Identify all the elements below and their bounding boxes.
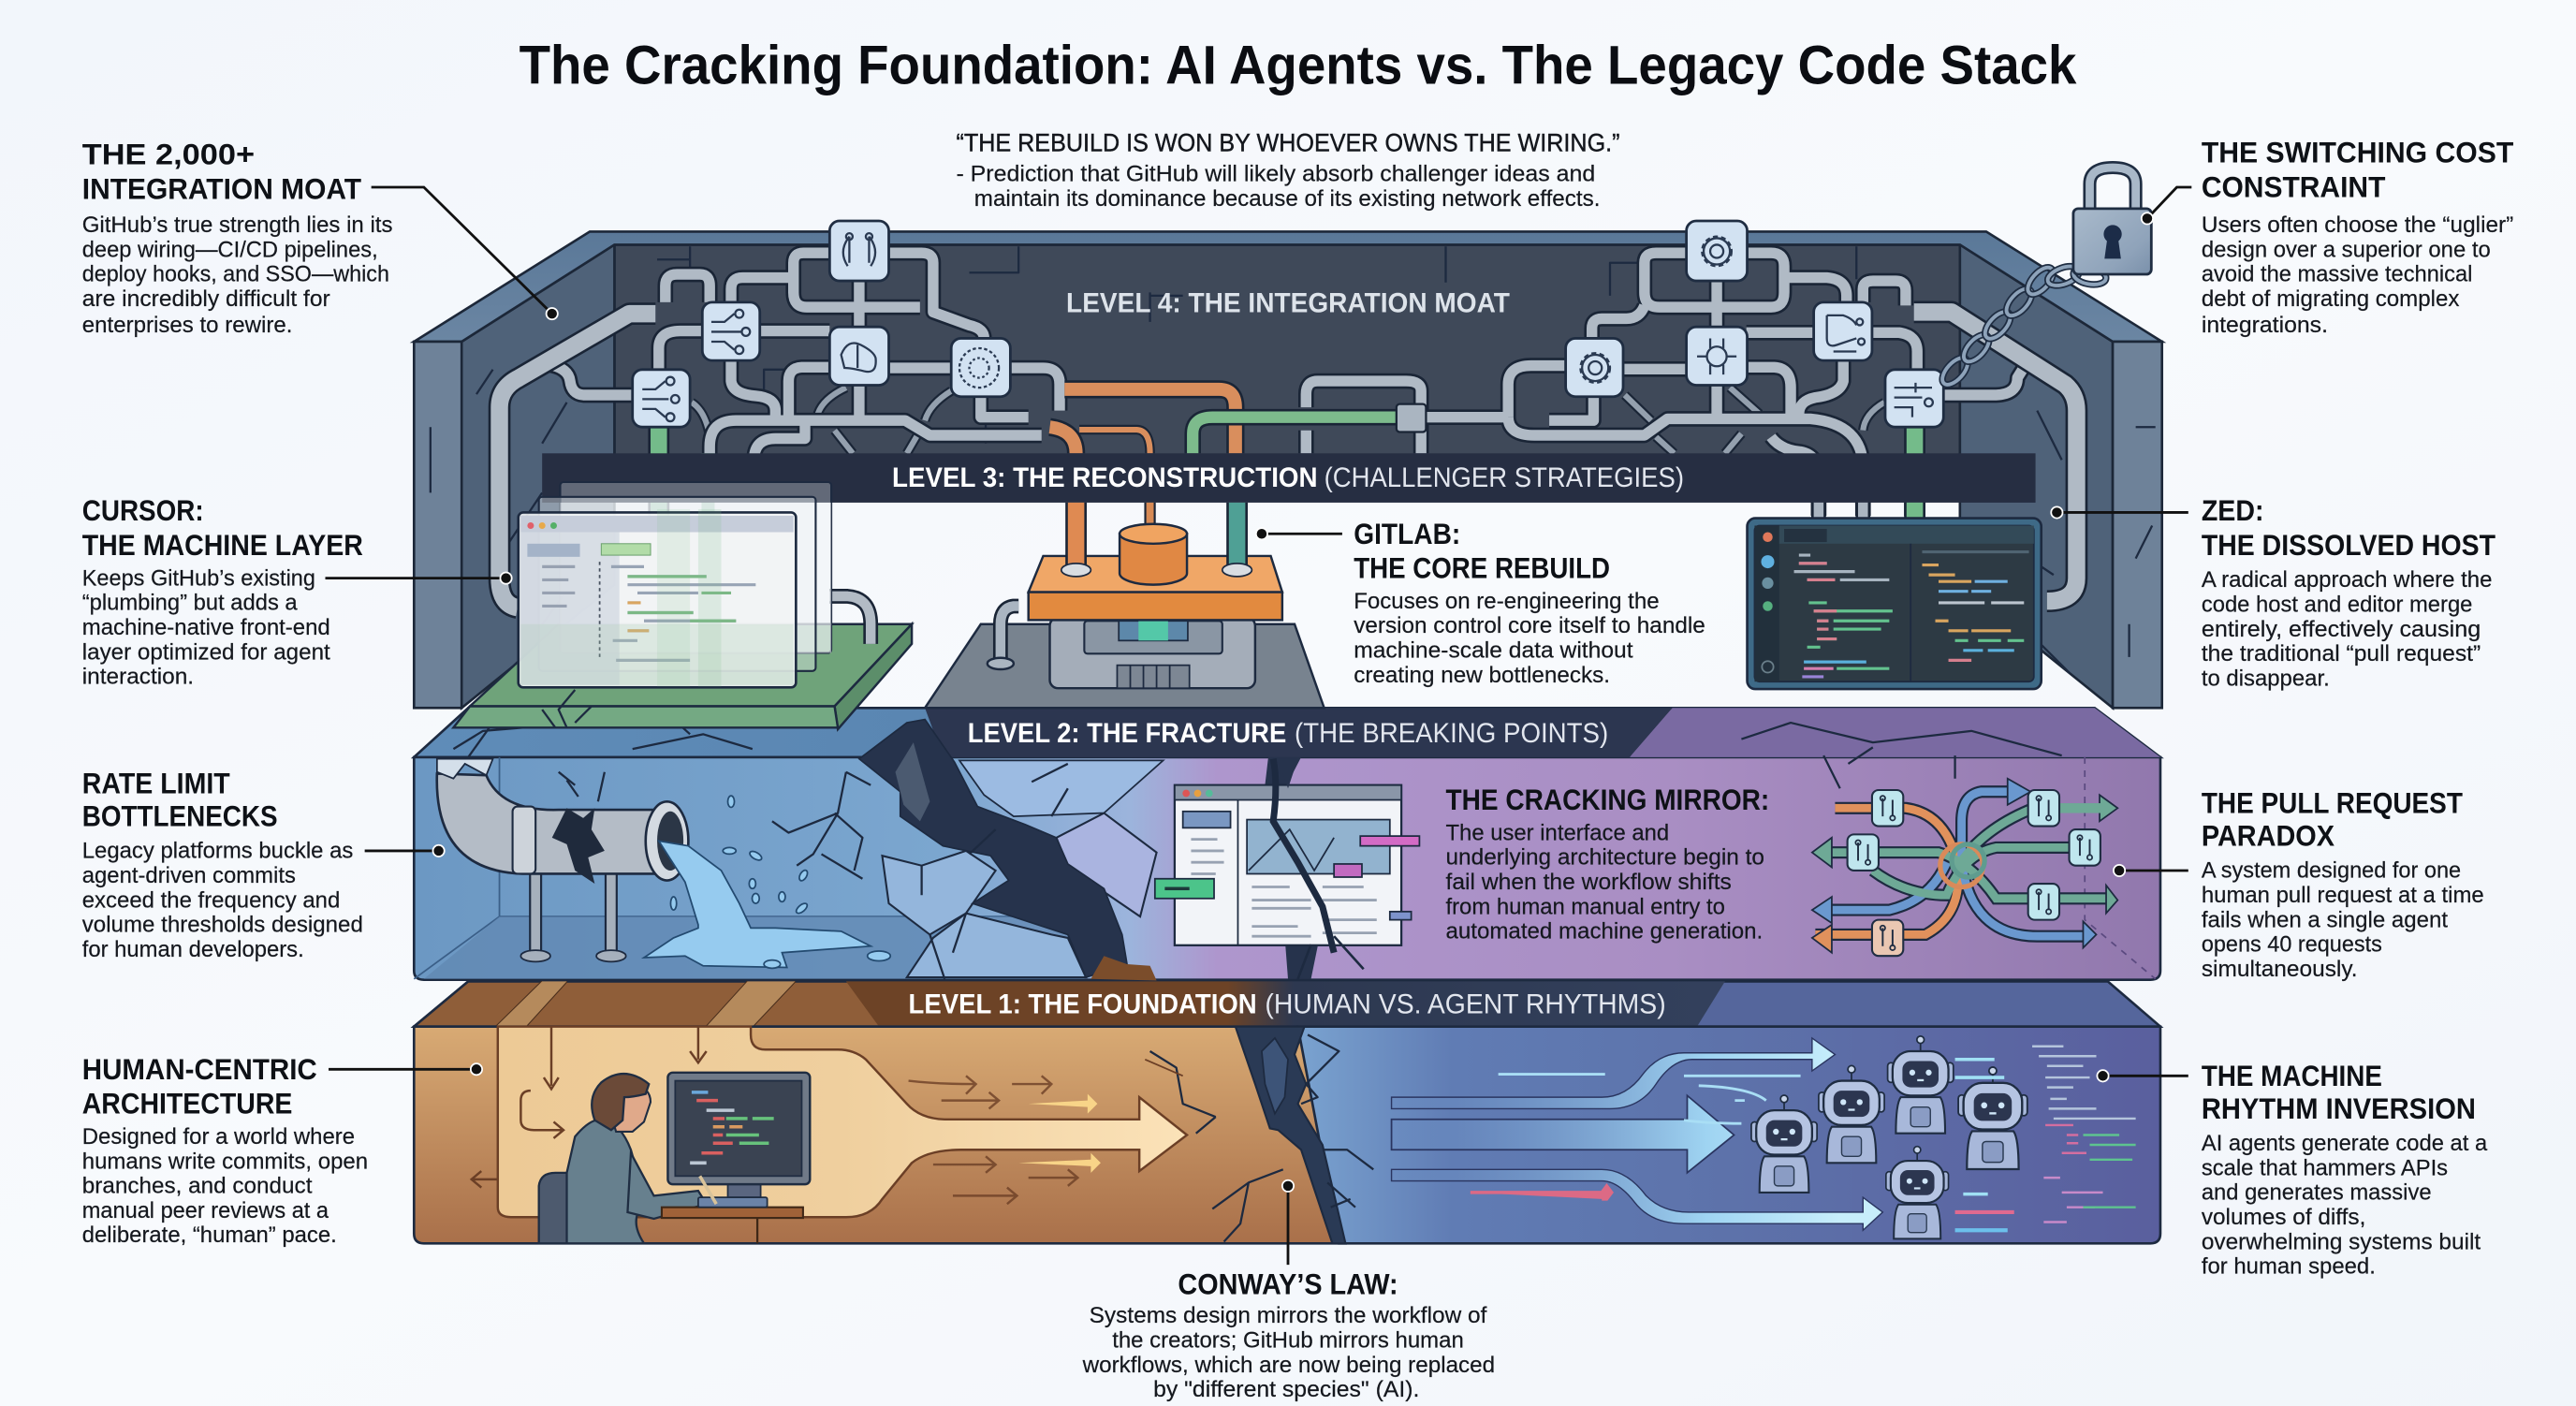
callout: machine rhythm inversion: AI agents generate code at a bbox=[2202, 1131, 2488, 1156]
callout: machine rhythm inversion: overwhelming systems built bbox=[2202, 1229, 2481, 1254]
platform: cursor green slab bbox=[453, 624, 912, 729]
icon: pull request nodes bbox=[1848, 790, 2100, 956]
arrow: rate limit leader bbox=[365, 845, 445, 857]
icon: water leak bbox=[644, 796, 890, 968]
callout: conway's law: by "different species" (AI). bbox=[1153, 1377, 1419, 1402]
label: level 2: LEVEL 2: THE FRACTURE bbox=[968, 718, 1286, 749]
quote: rebuild prediction: maintain its dominance because of its existing network effects. bbox=[974, 186, 1600, 212]
callout: pull request paradox bbox=[2202, 786, 2484, 982]
callout: the 2,000+ integration moat: THE 2,000+ bbox=[82, 137, 255, 170]
callout: gitlab core rebuild: version control core itself to handle bbox=[1354, 613, 1705, 638]
callout: gitlab core rebuild: machine-scale data without bbox=[1354, 638, 1633, 664]
crack: level 1 chasm bbox=[1145, 1027, 1373, 1243]
callout: zed dissolved host: code host and editor merge bbox=[2202, 592, 2472, 617]
icon: integration hub 10 bbox=[1885, 370, 1943, 427]
arrowheads: pull request flows bbox=[1812, 779, 2117, 953]
callout: conway's law: Systems design mirrors the workflow of bbox=[1090, 1303, 1487, 1328]
pipe network: left bbox=[500, 253, 1060, 608]
icon: gitlab core machine bbox=[1029, 503, 1282, 688]
label: level 1: LEVEL 1: THE FOUNDATION bbox=[909, 989, 1257, 1020]
arrows: fading highlights bbox=[1018, 1094, 1101, 1173]
arrow: machine rhythm leader bbox=[2097, 1070, 2188, 1081]
icon: cracking browser mirror bbox=[1155, 759, 1419, 979]
callout: machine rhythm inversion bbox=[2202, 1059, 2488, 1280]
callout: human-centric architecture bbox=[82, 1052, 368, 1248]
text: the cracking mirror: underlying architecture begin to bbox=[1445, 845, 1764, 871]
icon: zed editor monitor bbox=[1748, 519, 2042, 689]
callout: gitlab core rebuild bbox=[1354, 517, 1705, 688]
icon: robot 5 bbox=[1886, 1147, 1949, 1238]
icon: integration hub 9 gear bbox=[1566, 338, 1623, 397]
icon: broken pipe bbox=[437, 759, 688, 961]
callout: the 2,000+ integration moat: deep wiring—CI/CD pipelines, bbox=[82, 237, 378, 262]
callout: pull request paradox: PARADOX bbox=[2202, 819, 2334, 853]
icon: robot 2 bbox=[1819, 1065, 1884, 1163]
arrows: agent flows bbox=[1392, 1038, 1882, 1230]
icon: robot 3 bbox=[1888, 1036, 1954, 1134]
icon: integration hub 2 bbox=[702, 302, 760, 360]
callout: zed dissolved host: the traditional “pull request” bbox=[2202, 641, 2481, 666]
icon: integration hub 7 bbox=[1687, 327, 1748, 385]
callout: zed dissolved host: A radical approach where the bbox=[2202, 567, 2492, 593]
callout: rate limit bottlenecks: volume thresholds designed bbox=[82, 913, 363, 938]
callout: conway's law: the creators; GitHub mirrors human bbox=[1112, 1328, 1464, 1354]
callout: switching cost constraint: debt of migrating complex bbox=[2202, 286, 2459, 312]
callout: rate limit bottlenecks bbox=[82, 767, 363, 962]
arrow: gitlab leader bbox=[1256, 528, 1342, 539]
callout: conway's law: workflows, which are now being replaced bbox=[1082, 1353, 1495, 1378]
icon: padlock and chain bbox=[1938, 168, 2151, 388]
callout: zed dissolved host: to disappear. bbox=[2202, 666, 2330, 691]
callout: zed dissolved host: entirely, effectively causing bbox=[2202, 617, 2481, 642]
icon: integration hub 1 bbox=[829, 221, 889, 281]
callout: cursor machine layer: THE MACHINE LAYER bbox=[82, 528, 363, 562]
pipe network: right bbox=[1306, 253, 2076, 601]
callout: cursor machine layer: layer optimized for agent bbox=[82, 639, 330, 665]
callout: the 2,000+ integration moat: GitHub’s true strength lies in its bbox=[82, 212, 392, 238]
callout: rate limit bottlenecks: agent-driven commits bbox=[82, 863, 296, 888]
callout: pull request paradox: human pull request at a time bbox=[2202, 883, 2484, 908]
arrow: integration moat leader bbox=[372, 187, 558, 319]
icon: developer at desk bbox=[539, 1073, 810, 1243]
icon: tangled pull requests bbox=[1815, 792, 2106, 936]
callout: machine rhythm inversion: scale that hammers APIs bbox=[2202, 1155, 2448, 1180]
callout: pull request paradox: opens 40 requests bbox=[2202, 932, 2382, 958]
crack: rock shards bbox=[772, 720, 1325, 981]
icon: robot 4 bbox=[1958, 1067, 2027, 1169]
label: level 2: (THE BREAKING POINTS) bbox=[1295, 718, 1608, 749]
callout: gitlab core rebuild: Focuses on re-engineering the bbox=[1354, 589, 1660, 614]
callout: gitlab core rebuild: creating new bottlenecks. bbox=[1354, 663, 1610, 688]
quote: rebuild prediction: “THE REBUILD IS WON BY WHOEVER OWNS THE WIRING.” bbox=[956, 127, 1620, 156]
panel: level 3 header bar bbox=[542, 453, 2036, 503]
callout: conway's law: CONWAY’S LAW: bbox=[1178, 1267, 1398, 1301]
callout: cursor machine layer bbox=[82, 493, 363, 690]
panel: level 2 slab bbox=[414, 708, 2160, 980]
callout: switching cost constraint: Users often choose the “uglier” bbox=[2202, 212, 2513, 238]
callout: the 2,000+ integration moat: enterprises to rewire. bbox=[82, 313, 292, 338]
arrows: small human steps bbox=[472, 1027, 1077, 1204]
icon: integration hub 5 bbox=[633, 370, 690, 427]
callout: cursor machine layer: interaction. bbox=[82, 665, 194, 690]
callout: pull request paradox: THE PULL REQUEST bbox=[2202, 786, 2463, 820]
panel: level 4 integration moat wall bbox=[414, 231, 2162, 708]
callout: human-centric architecture: manual peer reviews at a bbox=[82, 1198, 329, 1223]
callout: pull request paradox: fails when a single agent bbox=[2202, 907, 2448, 932]
callout: switching cost constraint: THE SWITCHING COST bbox=[2202, 136, 2513, 169]
callout: zed dissolved host: THE DISSOLVED HOST bbox=[2202, 528, 2496, 562]
callout: the 2,000+ integration moat bbox=[82, 137, 392, 338]
arrow: switching cost leader bbox=[2142, 187, 2191, 225]
callout: zed dissolved host bbox=[2202, 493, 2496, 691]
arrow: human-centric leader bbox=[329, 1063, 482, 1075]
icon: robot 1 bbox=[1751, 1095, 1817, 1193]
callout: the 2,000+ integration moat: deploy hooks, and SSO—which bbox=[82, 262, 389, 287]
callout: switching cost constraint: integrations. bbox=[2202, 313, 2328, 338]
title: The Cracking Foundation: AI Agents vs. The Legacy Code Stack bbox=[520, 35, 2077, 95]
icon: integration hub 3 bbox=[829, 327, 889, 385]
callout: cursor machine layer: CURSOR: bbox=[82, 493, 204, 527]
icon: integration hub 4 bbox=[951, 338, 1010, 397]
callout: switching cost constraint: avoid the massive technical bbox=[2202, 262, 2472, 287]
callout: switching cost constraint: design over a superior one to bbox=[2202, 237, 2491, 262]
icon: integration hub 8 bbox=[1814, 302, 1872, 360]
arrow: zed leader bbox=[2051, 506, 2188, 519]
pipe: elbow behind cursor windows bbox=[829, 596, 871, 644]
callout: human-centric architecture: branches, and conduct bbox=[82, 1174, 313, 1199]
callout: rate limit bottlenecks: for human developers. bbox=[82, 937, 304, 962]
arrow: cursor leader bbox=[326, 573, 512, 584]
callout: machine rhythm inversion: volumes of diffs, bbox=[2202, 1205, 2365, 1230]
callout: rate limit bottlenecks: RATE LIMIT bbox=[82, 767, 230, 800]
callout: machine rhythm inversion: and generates massive bbox=[2202, 1180, 2432, 1206]
callout: the 2,000+ integration moat: INTEGRATION MOAT bbox=[82, 171, 361, 205]
panel: level 3 header bar: LEVEL 3: THE RECONSTRUCTION bbox=[892, 462, 1318, 493]
callout: zed dissolved host: ZED: bbox=[2202, 493, 2264, 527]
arrow: conway's law leader bbox=[1282, 1180, 1294, 1265]
label: level 2 bbox=[968, 718, 1608, 749]
callout: rate limit bottlenecks: exceed the frequency and bbox=[82, 887, 340, 913]
arrow: human workflow bbox=[498, 1027, 1187, 1217]
callout: gitlab core rebuild: GITLAB: bbox=[1354, 517, 1460, 550]
callout: human-centric architecture: deliberate, “human” pace. bbox=[82, 1223, 337, 1248]
text: the cracking mirror: fail when the workflow shifts bbox=[1445, 870, 1732, 895]
callout: conway's law bbox=[1082, 1267, 1495, 1402]
text: the cracking mirror: THE CRACKING MIRROR: bbox=[1445, 783, 1769, 816]
label: level 4: LEVEL 4: THE INTEGRATION MOAT bbox=[1066, 287, 1510, 318]
callout: the 2,000+ integration moat: are incredibly difficult for bbox=[82, 286, 330, 312]
callout: cursor machine layer: Keeps GitHub’s existing bbox=[82, 565, 315, 591]
label: level 1 bbox=[909, 989, 1666, 1020]
pipes: orange and green challengers bbox=[659, 389, 1915, 516]
panel: level 1 slab bbox=[414, 981, 2160, 1243]
text: the cracking mirror: from human manual entry to bbox=[1445, 894, 1725, 919]
callout: human-centric architecture: Designed for a world where bbox=[82, 1124, 355, 1150]
callout: machine rhythm inversion: RHYTHM INVERSION bbox=[2202, 1091, 2476, 1125]
text: the cracking mirror: The user interface and bbox=[1445, 820, 1669, 845]
callout: switching cost constraint: CONSTRAINT bbox=[2202, 170, 2385, 204]
window stack: cursor machine layer bbox=[519, 482, 831, 687]
callout: gitlab core rebuild: THE CORE REBUILD bbox=[1354, 551, 1610, 585]
callout: machine rhythm inversion: for human speed. bbox=[2202, 1254, 2376, 1280]
callout: human-centric architecture: HUMAN-CENTRIC bbox=[82, 1052, 317, 1086]
callout: cursor machine layer: “plumbing” but adds a bbox=[82, 591, 298, 616]
pipes: below level 3 to zed monitor bbox=[1819, 503, 1915, 519]
quote: rebuild prediction: - Prediction that GitHub will likely absorb challenger ideas and bbox=[956, 162, 1595, 187]
callout: human-centric architecture: ARCHITECTURE bbox=[82, 1087, 292, 1120]
callout: pull request paradox: A system designed for one bbox=[2202, 858, 2461, 884]
label: level 1: (HUMAN VS. AGENT RHYTHMS) bbox=[1265, 989, 1666, 1020]
callout: machine rhythm inversion: THE MACHINE bbox=[2202, 1059, 2382, 1092]
text: the cracking mirror bbox=[1445, 783, 1769, 945]
platform: gitlab base slab bbox=[925, 606, 1325, 708]
quote: rebuild prediction bbox=[956, 127, 1620, 212]
icon: integration hub 6 gear bbox=[1687, 221, 1748, 281]
panel: level 3 header bar: (CHALLENGER STRATEGIES) bbox=[1325, 462, 1684, 493]
text: the cracking mirror: automated machine generation. bbox=[1445, 919, 1763, 945]
callout: human-centric architecture: humans write commits, open bbox=[82, 1149, 368, 1174]
callout: pull request paradox: simultaneously. bbox=[2202, 957, 2358, 982]
callout: cursor machine layer: machine-native front-end bbox=[82, 615, 330, 640]
callout: rate limit bottlenecks: BOTTLENECKS bbox=[82, 799, 278, 833]
callout: rate limit bottlenecks: Legacy platforms buckle as bbox=[82, 839, 353, 864]
code stream bbox=[1955, 1047, 2136, 1230]
arrow: pull request leader bbox=[2114, 865, 2188, 876]
callout: switching cost constraint bbox=[2202, 136, 2513, 338]
